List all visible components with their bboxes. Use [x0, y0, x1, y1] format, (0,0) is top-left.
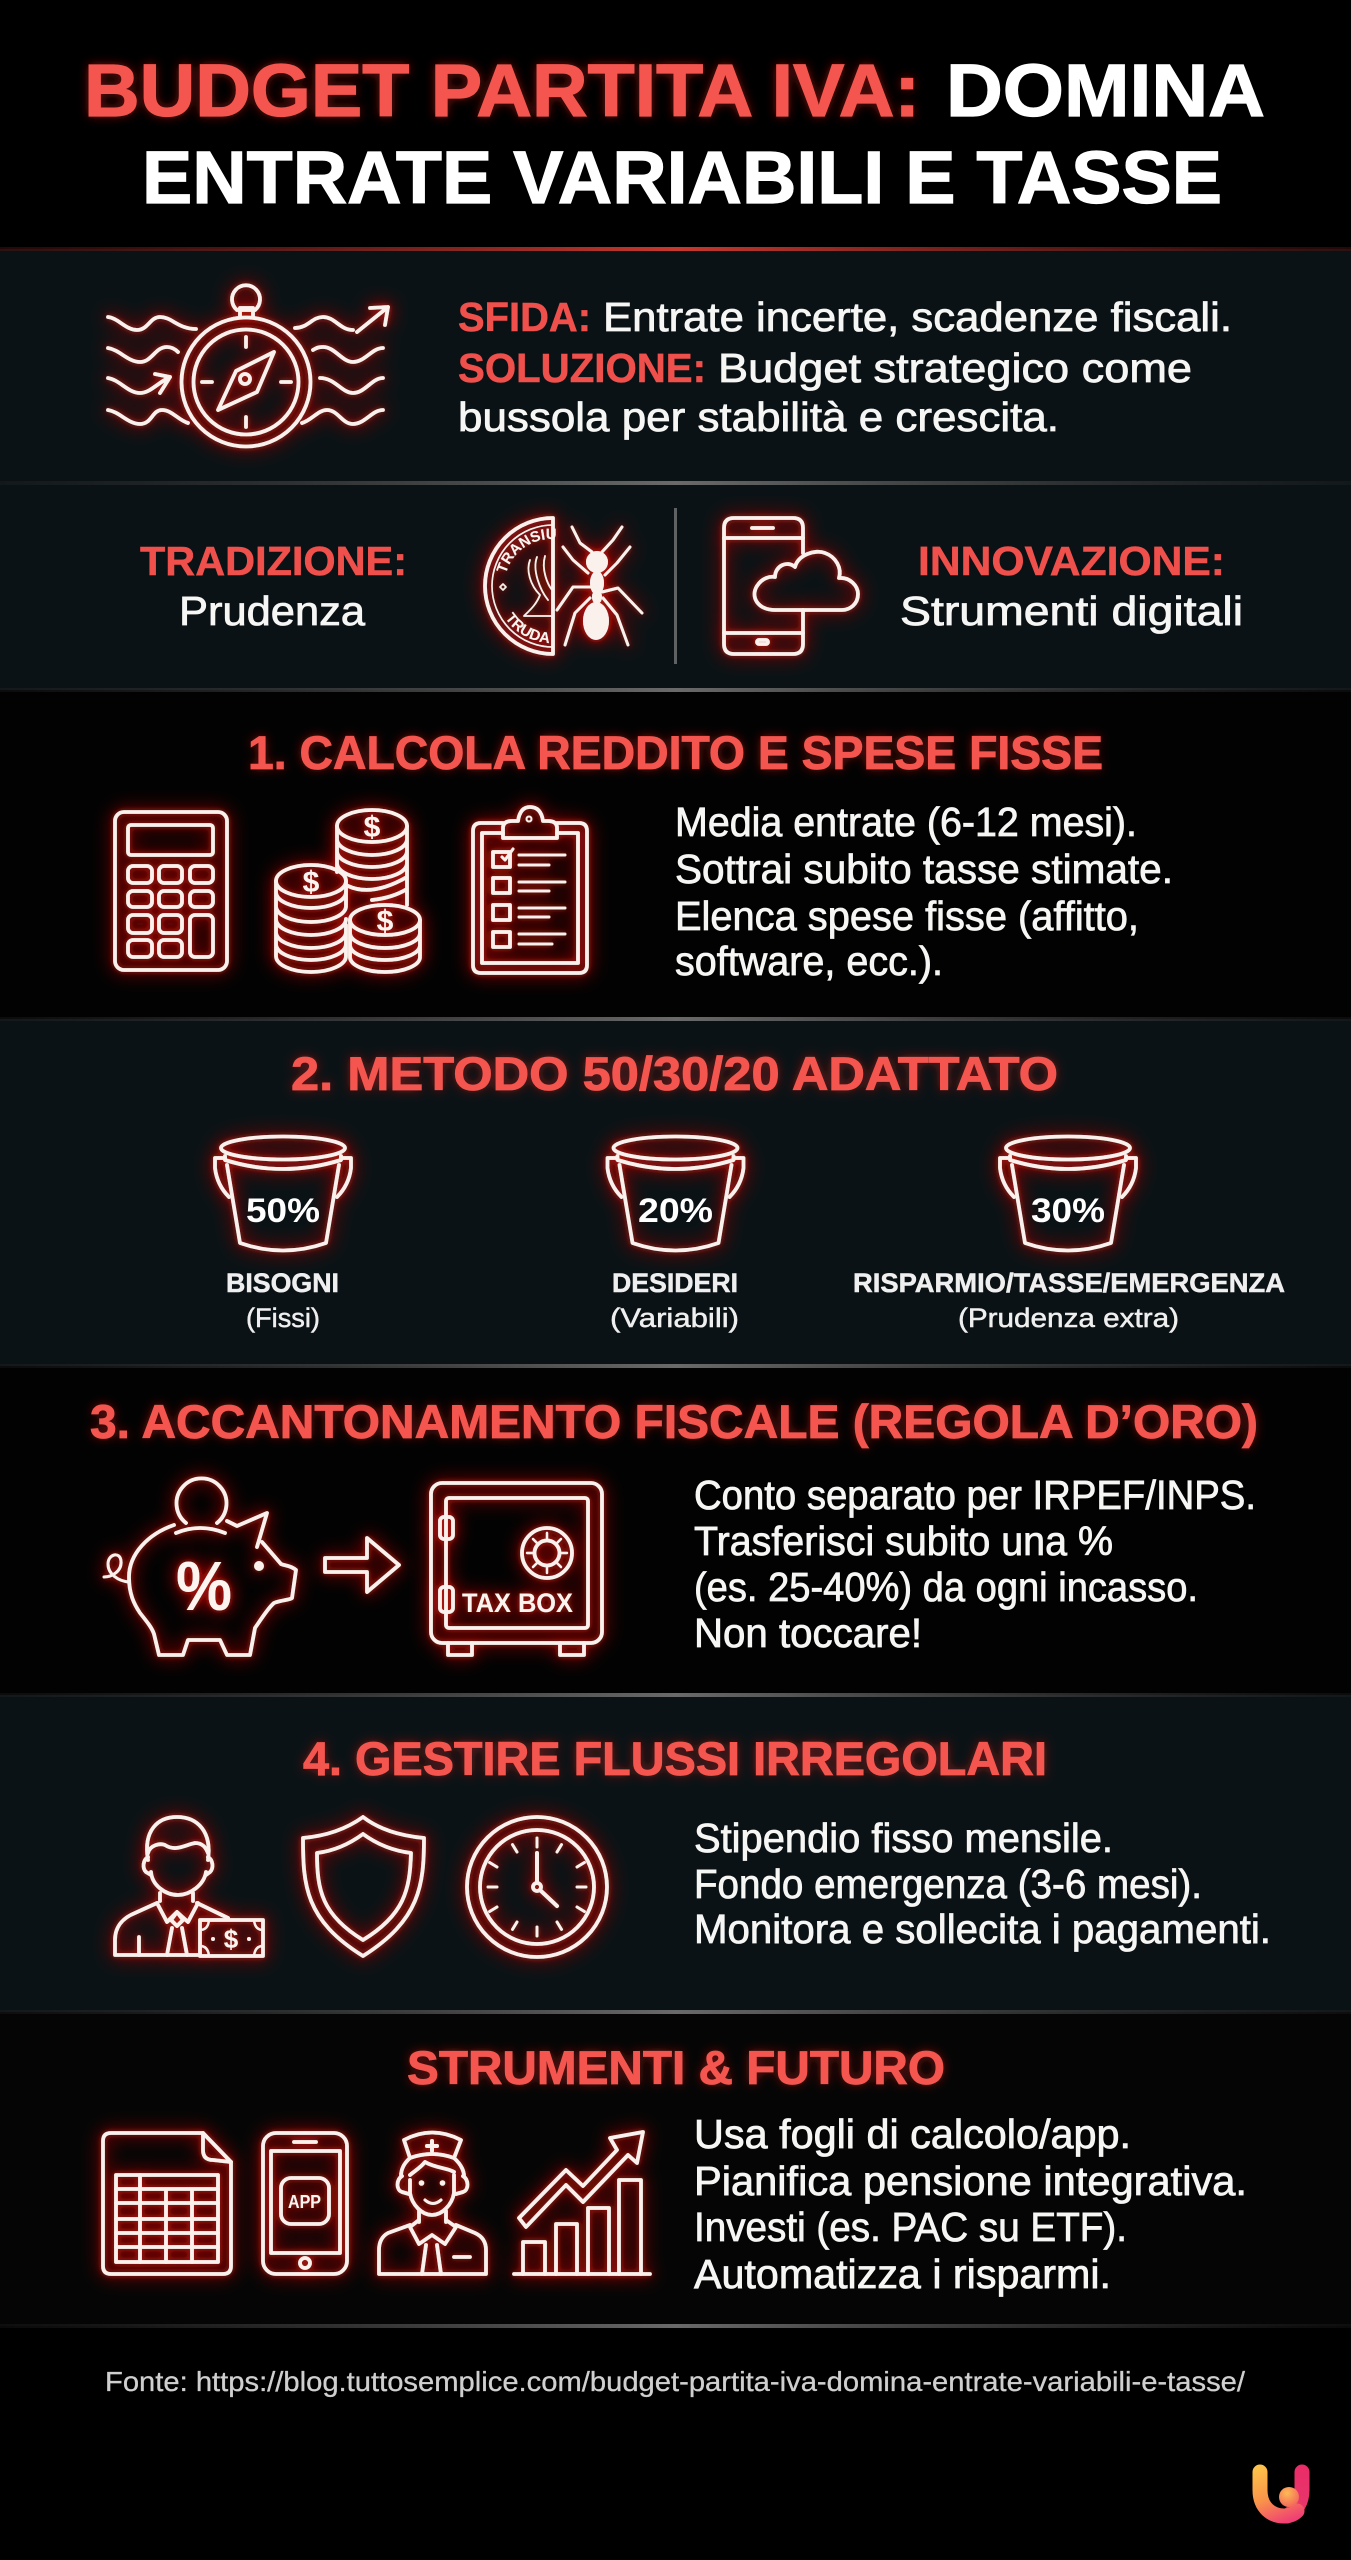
- text: strumenti: Pianifica pensione integrativa.: [694, 2158, 1247, 2204]
- footer: [0, 2324, 1351, 2516]
- icon: bucket: [608, 1136, 744, 1250]
- text: sfida e soluzione: SOLUZIONE:: [458, 345, 706, 391]
- text: strumenti: [694, 2111, 1247, 2297]
- text: step 4: Stipendio fisso mensile.: [694, 1815, 1113, 1861]
- text: tradizione: [140, 538, 407, 634]
- icon: spreadsheet: [103, 2133, 231, 2274]
- title: [84, 49, 1265, 219]
- title: DOMINA: [946, 49, 1265, 132]
- panel: step 3: [0, 1364, 1351, 1695]
- icon: bucket: [1000, 1136, 1136, 1250]
- text: step 4: Fondo emergenza (3-6 mesi).: [694, 1861, 1202, 1907]
- bucket 20%: [608, 1136, 744, 1333]
- arrow: [325, 1538, 399, 1592]
- text: sfida e soluzione: SFIDA:: [458, 294, 591, 340]
- text: step 1: Sottrai subito tasse stimate.: [675, 846, 1173, 892]
- bucket 30%: 30%: [1031, 1192, 1105, 1230]
- text: step 3: Conto separato per IRPEF/INPS.: [694, 1472, 1256, 1518]
- icon: piggy bank: %: [176, 1547, 232, 1625]
- icon: bucket: [215, 1136, 351, 1250]
- icon: compass in waves: [108, 285, 388, 446]
- icon: safe TAX BOX: TAX BOX: [462, 1588, 573, 1618]
- icon: half coin and ant: [469, 503, 650, 669]
- text: step 1: Media entrate (6-12 mesi).: [675, 799, 1137, 845]
- text: step 1: software, ecc.).: [675, 938, 943, 984]
- text: sfida e soluzione: bussola per stabilità e crescita.: [458, 394, 1059, 440]
- heading: STRUMENTI & FUTURO: [407, 2041, 945, 2094]
- title: BUDGET PARTITA IVA:: [84, 49, 920, 132]
- bucket 20%: 20%: [638, 1192, 713, 1230]
- panel: tradizione e innovazione: [0, 481, 1351, 690]
- panel: sfida e soluzione: [0, 247, 1351, 483]
- text: strumenti: Automatizza i risparmi.: [694, 2251, 1111, 2297]
- text: tradizione: TRADIZIONE:: [140, 538, 407, 584]
- text: tradizione: Prudenza: [179, 588, 365, 634]
- icon: person with cash: [115, 1817, 263, 1956]
- logo: [1260, 2472, 1302, 2516]
- icon: half coin and ant: TRUDA: [500, 604, 558, 652]
- icon: half coin and ant: TRANSIU: [488, 520, 562, 580]
- icon: growth chart: [514, 2132, 650, 2274]
- icon: clipboard: [473, 807, 587, 973]
- panel: strumenti e futuro: [0, 2010, 1351, 2326]
- text: sfida e soluzione: Entrate incerte, scadenze fiscali.: [603, 294, 1232, 340]
- text: step 1: [675, 799, 1173, 984]
- text: step 3: Trasferisci subito una %: [694, 1518, 1113, 1564]
- bucket 20%: (Variabili): [610, 1303, 739, 1333]
- icon: phone app: [263, 2133, 347, 2274]
- text: innovazione: Strumenti digitali: [900, 588, 1243, 634]
- icon: phone app: APP: [288, 2192, 321, 2212]
- heading: 3. ACCANTONAMENTO FISCALE (REGOLA D’ORO): [90, 1395, 1258, 1448]
- text: step 4: Monitora e sollecita i pagamenti.: [694, 1906, 1271, 1952]
- bucket 20%: DESIDERI: [612, 1268, 738, 1298]
- text: strumenti: Usa fogli di calcolo/app.: [694, 2111, 1131, 2157]
- icon: calculator: [115, 812, 227, 970]
- icon: safe TAX BOX: [431, 1483, 602, 1655]
- title: ENTRATE VARIABILI E TASSE: [142, 136, 1222, 219]
- bucket 30%: [853, 1136, 1285, 1333]
- bucket 30%: RISPARMIO/TASSE/EMERGENZA: [853, 1268, 1285, 1298]
- text: step 4: [694, 1815, 1271, 1952]
- icon: doctor: [379, 2132, 486, 2274]
- text: step 3: (es. 25-40%) da ogni incasso.: [694, 1564, 1198, 1610]
- text: step 1: Elenca spese fisse (affitto,: [675, 893, 1139, 939]
- text: innovazione: INNOVAZIONE:: [918, 538, 1225, 584]
- icon: coin stacks: $: [303, 866, 320, 899]
- bucket 50%: [215, 1136, 351, 1333]
- heading: 4. GESTIRE FLUSSI IRREGOLARI: [303, 1732, 1047, 1785]
- text: innovazione: [900, 538, 1243, 634]
- heading: 1. CALCOLA REDDITO E SPESE FISSE: [248, 726, 1103, 779]
- text: step 3: Non toccare!: [694, 1610, 922, 1656]
- panel: step 4: [0, 1693, 1351, 2012]
- heading: 2. METODO 50/30/20 ADATTATO: [291, 1047, 1058, 1100]
- icon: coin stacks: $: [377, 905, 394, 938]
- icon: coin stacks: [276, 810, 420, 972]
- text: sfida e soluzione: [458, 294, 1232, 440]
- icon: coin stacks: $: [364, 811, 381, 844]
- bucket 30%: (Prudenza extra): [958, 1303, 1179, 1333]
- icon: shield: [303, 1817, 424, 1956]
- bucket 50%: 50%: [246, 1192, 320, 1230]
- icon: piggy bank: [104, 1478, 296, 1655]
- icon: clock: [467, 1817, 607, 1957]
- header panel: [84, 49, 1265, 219]
- icon: phone and cloud: [724, 518, 858, 654]
- source line: Fonte: https://blog.tuttosemplice.com/budget-partita-iva-domina-entrate-variabili-e-tasse/: [105, 2366, 1245, 2397]
- icon: person with cash: $: [224, 1924, 239, 1954]
- bucket 50%: BISOGNI: [226, 1268, 339, 1298]
- text: sfida e soluzione: Budget strategico come: [718, 345, 1192, 391]
- text: step 3: [694, 1472, 1256, 1656]
- text: strumenti: Investi (es. PAC su ETF).: [694, 2204, 1127, 2250]
- panel: step 1: [0, 688, 1351, 1019]
- panel: step 2: [0, 1017, 1351, 1366]
- bucket 50%: (Fissi): [246, 1303, 320, 1333]
